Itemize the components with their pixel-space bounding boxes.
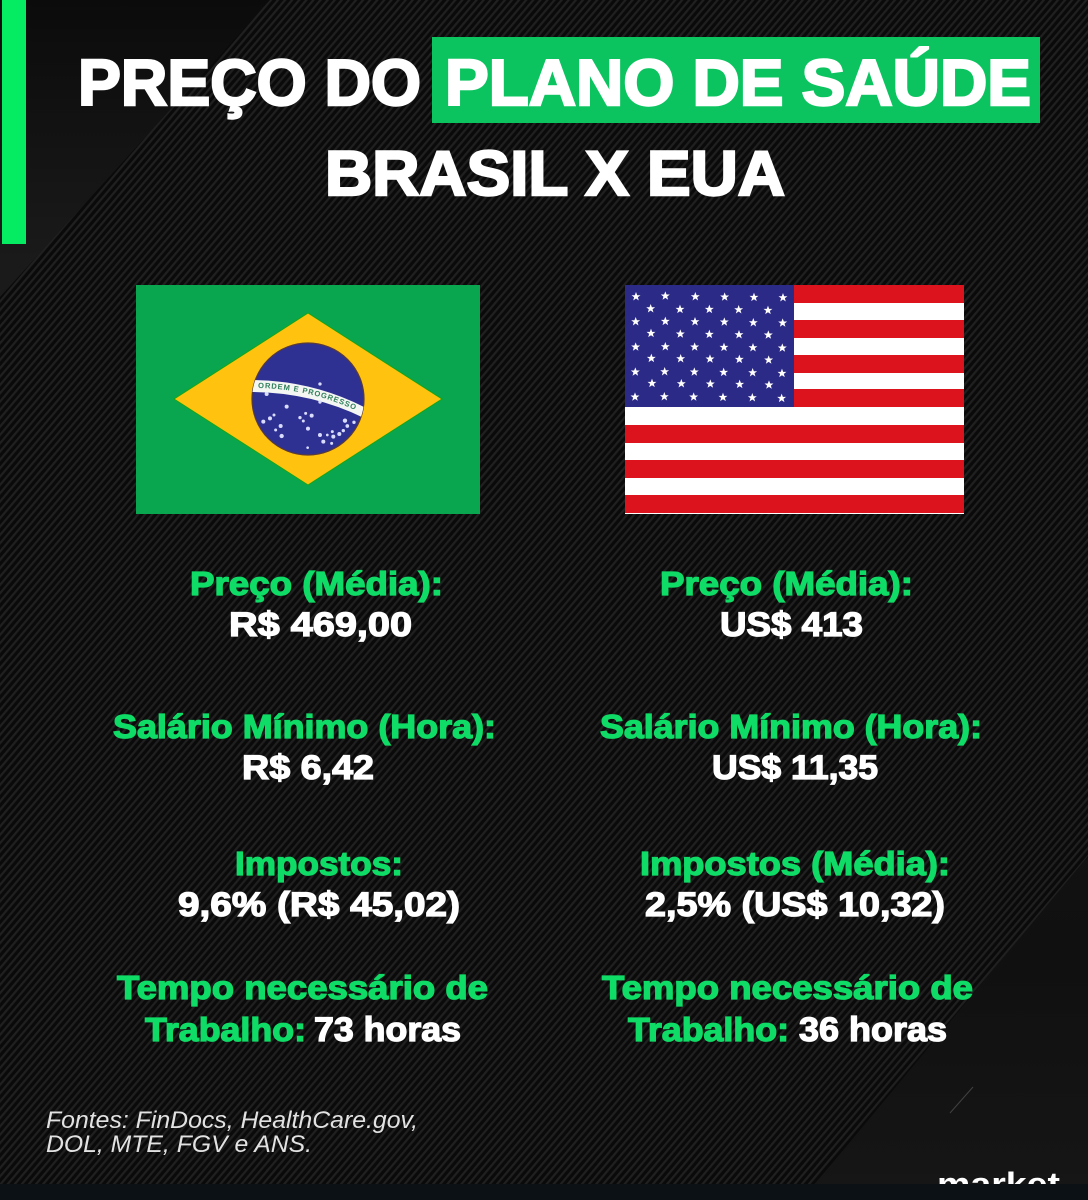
Brazil taxes: 9,6% (R$ 45,02) xyxy=(178,886,460,924)
Brazil work time: Tempo necessário de xyxy=(117,969,488,1006)
Brazil taxes xyxy=(178,845,460,924)
sources xyxy=(46,1107,418,1158)
Brazil work time: 73 horas xyxy=(314,1011,461,1049)
USA minimum wage: US$ 11,35 xyxy=(712,749,878,787)
bottom strip xyxy=(0,1184,1088,1200)
USA work time: Tempo necessário de xyxy=(602,969,973,1006)
subtitle: brasil x eua: BRASIL X EUA xyxy=(325,139,785,209)
Brazil minimum wage: R$ 6,42 xyxy=(242,749,374,787)
USA price: Preço (Média): xyxy=(660,565,913,602)
Brazil price xyxy=(190,565,443,644)
Brazil price: R$ 469,00 xyxy=(229,606,412,644)
icon: flag of the USA xyxy=(625,285,964,514)
USA price xyxy=(660,565,913,644)
Brazil minimum wage xyxy=(113,708,496,787)
Brazil work time xyxy=(117,969,488,1049)
USA taxes xyxy=(640,845,950,924)
title highlight: plano de saúde: PLANO DE SAÚDE xyxy=(445,46,1031,119)
USA taxes: Impostos (Média): xyxy=(640,845,950,882)
Brazil minimum wage: Salário Mínimo (Hora): xyxy=(113,708,496,745)
Brazil taxes: Impostos: xyxy=(235,845,403,882)
USA minimum wage xyxy=(600,708,982,787)
icon: flag of Brazil: ORDEM E PROGRESSO xyxy=(258,382,356,409)
USA price: US$ 413 xyxy=(720,606,863,644)
USA work time: Trabalho: xyxy=(628,1011,789,1048)
USA taxes: 2,5% (US$ 10,32) xyxy=(645,886,945,924)
Brazil price: Preço (Média): xyxy=(190,565,443,602)
sources: Fontes: FinDocs, HealthCare.gov, xyxy=(46,1107,418,1134)
USA work time xyxy=(602,969,973,1049)
sources: DOL, MTE, FGV e ANS. xyxy=(46,1131,312,1158)
panel: USA data xyxy=(600,565,982,1049)
panel: Brazil data xyxy=(113,565,496,1049)
title: preço do: PREÇO DO xyxy=(78,46,421,119)
icon: flag of Brazil xyxy=(136,285,480,514)
USA work time: 36 horas xyxy=(799,1011,947,1049)
green accent bar xyxy=(2,0,26,244)
Brazil work time: Trabalho: xyxy=(145,1011,306,1048)
USA minimum wage: Salário Mínimo (Hora): xyxy=(600,708,982,745)
title xyxy=(78,37,1040,209)
